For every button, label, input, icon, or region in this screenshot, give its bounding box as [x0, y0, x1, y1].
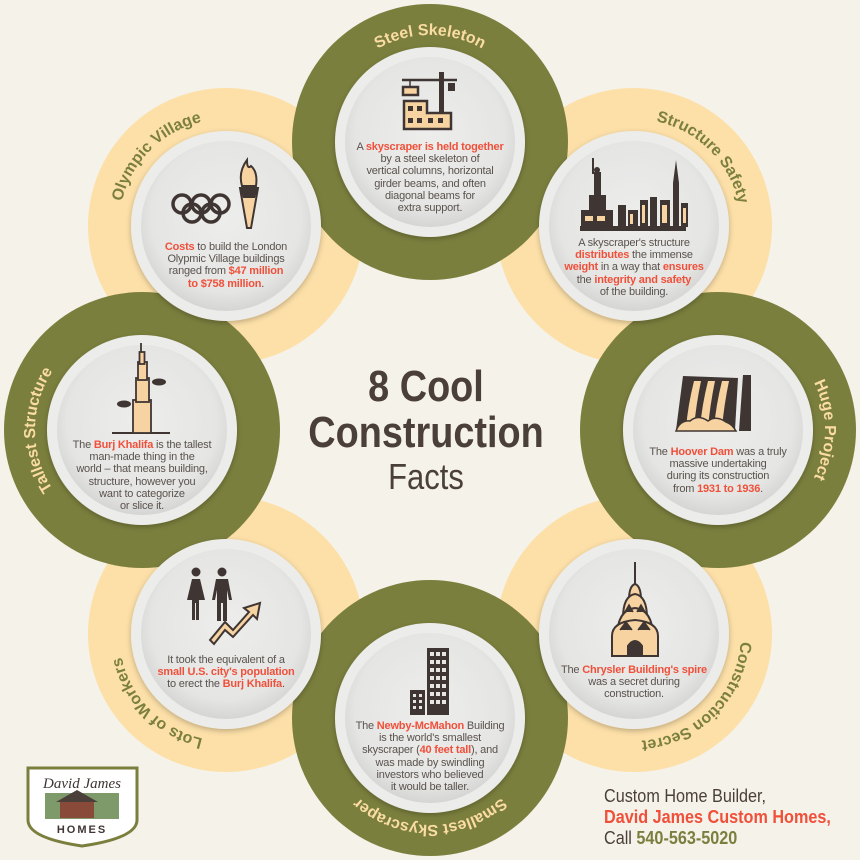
text: lots of workers	[158, 654, 294, 690]
text: smallest skyscraper: was made by swindling	[376, 757, 484, 769]
text: olympic village: ranged from $47 million	[169, 265, 283, 277]
text: huge project: massive undertaking	[669, 458, 767, 470]
icon: olympic rings and torch	[173, 160, 258, 228]
title: Facts	[388, 456, 464, 497]
label: Construction Secret: Construction Secret	[642, 642, 752, 751]
logo: David James Homes	[28, 768, 137, 846]
text: olympic village: Olypmic Village buildings	[167, 253, 285, 265]
text: lots of workers: to erect the Burj Khalifa.	[167, 678, 285, 690]
icon: people and rising arrow	[187, 568, 260, 644]
ring: tan outer circles	[88, 88, 772, 772]
text: structure safety	[564, 237, 704, 298]
text: tallest structure	[72, 439, 212, 512]
icon: skyline with statue of liberty	[580, 158, 688, 231]
logo: David James Homes: David James	[42, 776, 121, 792]
text: tallest structure: world – that means building,	[76, 463, 208, 475]
text: steel skeleton: A skyscraper is held together	[356, 141, 504, 153]
text: steel skeleton: by a steel skeleton of	[381, 153, 479, 165]
inner circles	[47, 47, 813, 813]
label: Tallest Structure: Tallest Structure	[24, 368, 52, 495]
text: tallest structure: The Burj Khalifa is the tallest	[73, 439, 211, 451]
text: smallest skyscraper: it would be taller.	[391, 781, 469, 793]
call to action: Custom Home Builder,	[604, 786, 766, 806]
text: huge project: from 1931 to 1936.	[673, 483, 763, 495]
text: steel skeleton: extra support.	[398, 202, 462, 214]
title: 8 Cool	[368, 362, 484, 411]
text: tallest structure: want to categorize	[99, 488, 185, 500]
call to action: David James Custom Homes,	[604, 807, 831, 827]
label: Steel Skeleton: Steel Skeleton	[374, 23, 484, 48]
label: Huge Project: Huge Project	[814, 379, 836, 481]
icon: burj khalifa	[112, 343, 170, 433]
icon: dam	[676, 375, 751, 431]
text: steel skeleton: girder beams, and often	[374, 178, 486, 190]
icon: crane and building	[402, 72, 457, 130]
call to action: Call 540-563-5020	[604, 828, 737, 848]
text: lots of workers: It took the equivalent of a	[167, 654, 285, 666]
text: olympic village	[165, 241, 287, 290]
text: huge project: during its construction	[667, 470, 769, 482]
text: construction secret: was a secret during	[588, 676, 680, 688]
text: structure safety: weight in a way that ensures	[564, 261, 704, 273]
text: structure safety: the integrity and safety	[577, 274, 691, 286]
text: tallest structure: structure, however you	[89, 476, 195, 488]
label: Structure Safety: Structure Safety	[657, 111, 747, 202]
text: smallest skyscraper: investors who believed	[377, 769, 483, 781]
text: smallest skyscraper: is the world's smallest	[379, 732, 481, 744]
text: structure safety: distributes the immense	[575, 249, 693, 261]
text: olympic village: Costs to build the London	[165, 241, 287, 253]
label: Lots of Workers: Lots of Workers	[114, 658, 202, 749]
text: steel skeleton	[356, 141, 504, 214]
title: Construction	[308, 408, 544, 457]
text: smallest skyscraper: skyscraper (40 feet tall), and	[362, 744, 498, 756]
logo: David James Homes: HOMES	[57, 824, 107, 836]
text: tallest structure: man-made thing in the	[89, 451, 195, 463]
text: construction secret: construction.	[604, 688, 664, 700]
label: Olympic Village: Olympic Village	[112, 114, 200, 200]
text: construction secret: The Chrysler Building's spire	[561, 664, 707, 676]
text: structure safety: A skyscraper's structure	[578, 237, 690, 249]
call to action	[604, 786, 831, 848]
text: huge project: The Hoover Dam was a truly	[649, 446, 787, 458]
text: olympic village: to $758 million.	[188, 278, 264, 290]
title	[308, 362, 544, 497]
text: lots of workers: small U.S. city's population	[158, 666, 294, 678]
label: Smallest Skyscraper: Smallest Skyscraper	[353, 799, 506, 836]
text: steel skeleton: diagonal beams for	[385, 190, 475, 202]
text: construction secret	[561, 664, 707, 700]
icon: newby-mcmahon building	[410, 648, 449, 715]
text: steel skeleton: vertical columns, horizontal	[366, 165, 494, 177]
icon: chrysler building spire	[612, 562, 658, 656]
text: smallest skyscraper	[356, 720, 504, 793]
text: smallest skyscraper: The Newby-McMahon Building	[356, 720, 504, 732]
text: structure safety: of the building.	[600, 286, 668, 298]
text: huge project	[649, 446, 787, 495]
text: tallest structure: or slice it.	[120, 500, 164, 512]
